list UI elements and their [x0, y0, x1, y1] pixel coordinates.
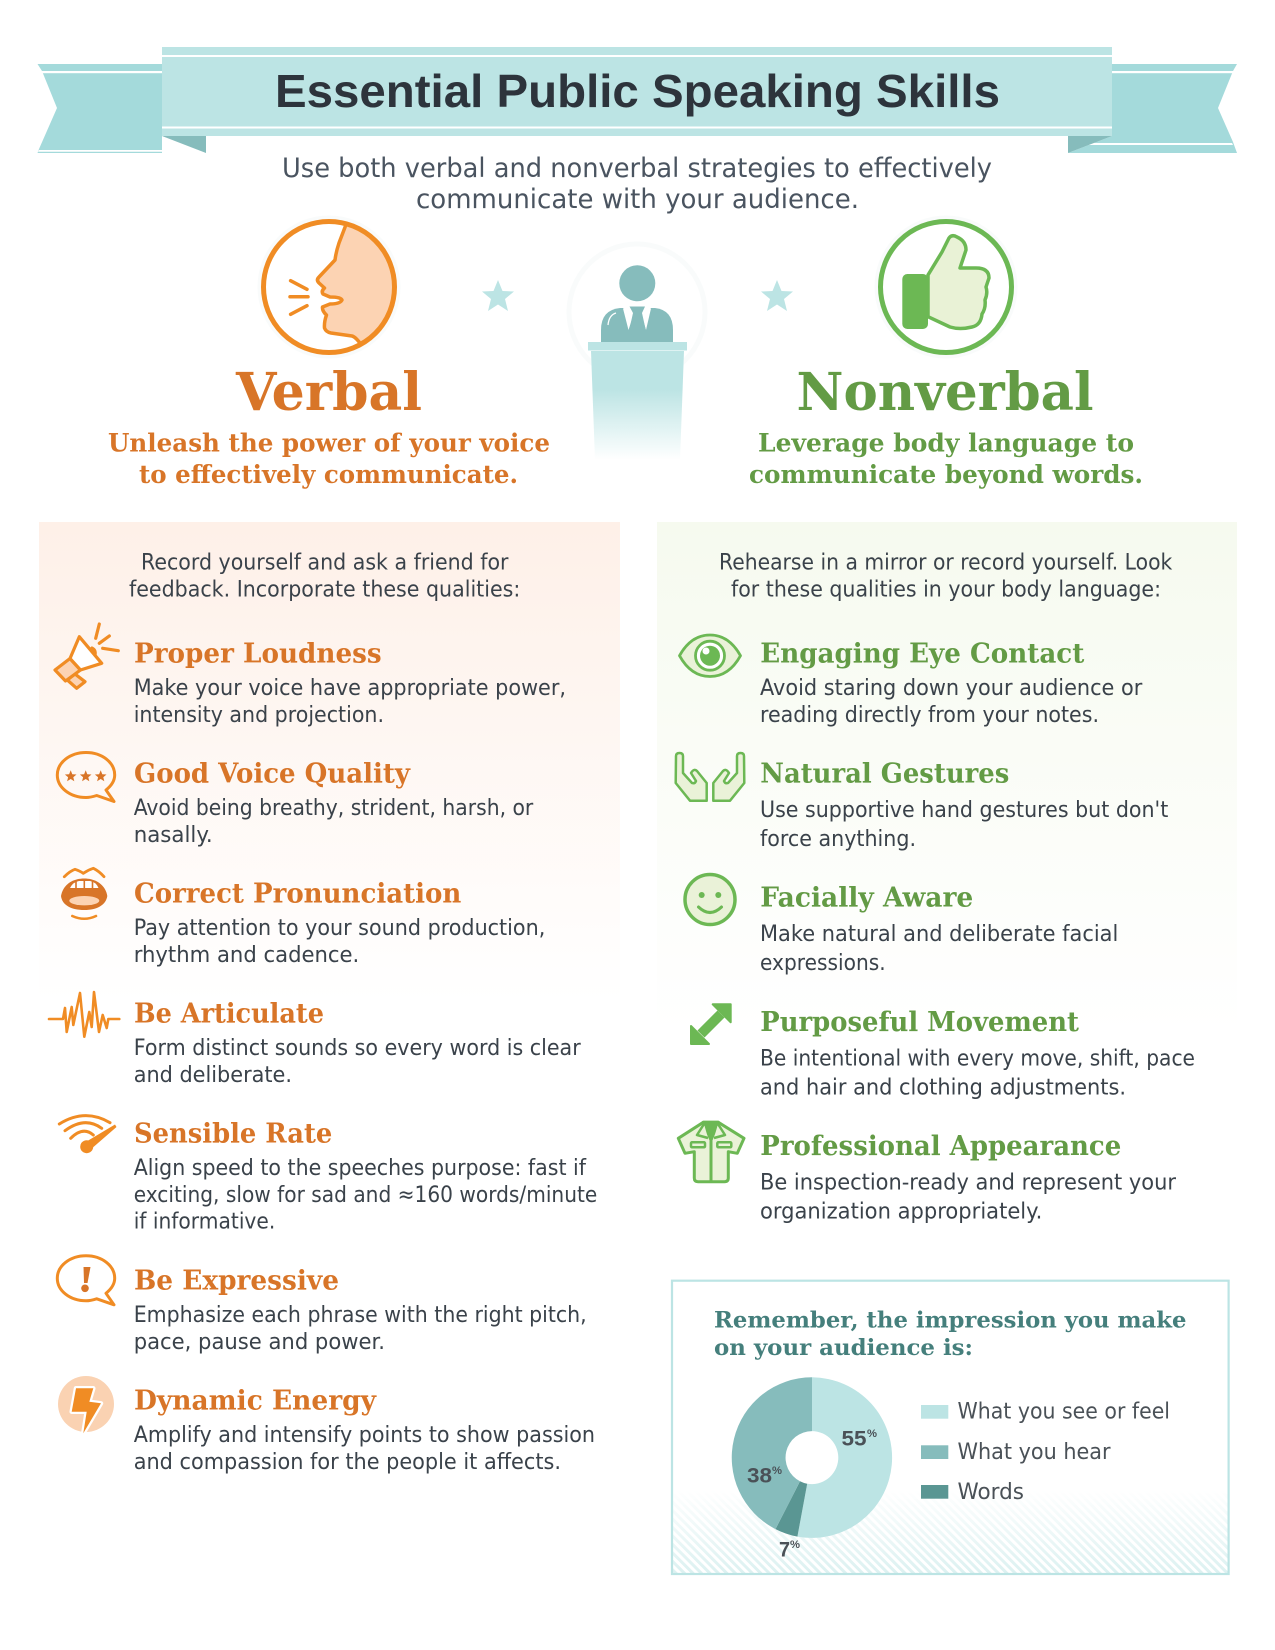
item: Good Voice Quality: Good Voice Quality [134, 759, 411, 790]
chart heading: on your audience is: [714, 1335, 973, 1361]
banner main [162, 47, 1112, 136]
item: Be Articulate: Form distinct sounds so every word is clear [134, 1036, 582, 1061]
icon: shirt [678, 1122, 744, 1182]
item: Professional Appearance: Professional Appearance [760, 1131, 1121, 1162]
item: Natural Gestures: Natural Gestures [760, 759, 1009, 790]
nonverbal tagline: Leverage body language to [758, 429, 1134, 458]
item: Proper Loudness: intensity and projection. [134, 703, 384, 728]
item: Be Expressive [134, 1265, 587, 1355]
chart heading [714, 1308, 1186, 1361]
item: Engaging Eye Contact: Avoid staring down your audience or [760, 676, 1143, 701]
item: Be Articulate: Be Articulate [134, 998, 324, 1029]
label 38% [747, 1465, 782, 1488]
item: Facially Aware [760, 883, 1118, 976]
heading: Nonverbal: Nonverbal [796, 362, 1094, 423]
title banner [38, 47, 1237, 153]
icon: lightning bolt [58, 1376, 114, 1433]
verbal intro: Record yourself and ask a friend for [141, 550, 509, 575]
panel: nonverbal qualities [657, 522, 1237, 1224]
item: Professional Appearance [760, 1131, 1177, 1224]
item: Natural Gestures [760, 759, 1169, 852]
banner left tail [38, 64, 206, 153]
label 38%: 38 [747, 1465, 772, 1488]
item: Purposeful Movement: Purposeful Movement [760, 1007, 1079, 1038]
icon: eye [680, 635, 740, 676]
item: Proper Loudness: Proper Loudness [134, 639, 382, 670]
item: Purposeful Movement: Be intentional with every move, shift, pace [760, 1046, 1195, 1071]
label 7% [779, 1539, 800, 1562]
item: Be Expressive: Emphasize each phrase with the right pitch, [134, 1303, 587, 1328]
item: Dynamic Energy: and compassion for the people it affects. [134, 1450, 561, 1475]
item: Facially Aware: Facially Aware [760, 883, 973, 914]
item: Sensible Rate: exciting, slow for sad and ≈160 words/minute [134, 1183, 597, 1208]
heading: Verbal: Verbal [235, 362, 422, 423]
icon: speech bubble with stars [57, 752, 115, 802]
item: Be Expressive: pace, pause and power. [134, 1330, 385, 1355]
banner right tail [1068, 64, 1237, 153]
verbal intro [129, 550, 520, 602]
icon: double arrow [691, 1004, 731, 1044]
label 7%: % [790, 1539, 800, 1551]
item: Good Voice Quality [134, 759, 534, 848]
icon: thumbs up [876, 218, 1016, 356]
item: Correct Pronunciation: rhythm and cadence. [134, 943, 359, 968]
item: Sensible Rate [134, 1118, 597, 1235]
subtitle: Use both verbal and nonverbal strategies to effectively [282, 153, 992, 184]
nonverbal tagline: communicate beyond words. [749, 460, 1143, 489]
item: Sensible Rate: Align speed to the speeches purpose: fast if [134, 1156, 587, 1181]
item: Facially Aware: Make natural and deliberate facial [760, 922, 1118, 947]
item: Sensible Rate: Sensible Rate [134, 1118, 332, 1149]
nonverbal intro: Rehearse in a mirror or record yourself. Look [719, 550, 1173, 575]
icon: open hands [676, 753, 744, 801]
item: Be Articulate: and deliberate. [134, 1063, 292, 1088]
item: Purposeful Movement [760, 1007, 1195, 1100]
item: Be Articulate [134, 998, 582, 1088]
item: Good Voice Quality: Avoid being breathy, strident, harsh, or [134, 796, 534, 821]
item: Engaging Eye Contact: Engaging Eye Contact [760, 639, 1085, 670]
panel: verbal qualities [39, 522, 620, 1475]
label 55%: % [867, 1428, 877, 1440]
legend: What you see or feel [958, 1400, 1170, 1425]
item: Proper Loudness: Make your voice have appropriate power, [134, 676, 566, 701]
icon: speaker at podium [569, 244, 705, 460]
label 7%: 7 [779, 1539, 790, 1562]
icon: speed gauge [59, 1116, 116, 1153]
item: Professional Appearance: Be inspection-ready and represent your [760, 1170, 1177, 1195]
icon: exclamation bubble [57, 1256, 115, 1305]
panel border [672, 1281, 1229, 1574]
icon: smiley face [685, 874, 735, 924]
nonverbal tagline [749, 429, 1143, 489]
item: Dynamic Energy: Amplify and intensify points to show passion [134, 1423, 595, 1448]
item: Purposeful Movement: and hair and clothing adjustments. [760, 1075, 1126, 1100]
nonverbal intro: for these qualities in your body language: [731, 577, 1161, 602]
subtitle: communicate with your audience. [416, 184, 859, 215]
label 55%: 55 [842, 1428, 867, 1451]
legend: Words [958, 1480, 1024, 1505]
verbal tagline: Unleash the power of your voice [108, 429, 550, 458]
panel: impression chart [672, 1281, 1229, 1574]
legend [921, 1400, 1170, 1505]
verbal tagline: to effectively communicate. [139, 460, 518, 489]
item: Natural Gestures: Use supportive hand gestures but don't [760, 798, 1169, 823]
item: Dynamic Energy: Dynamic Energy [134, 1385, 377, 1416]
legend: What you hear [958, 1440, 1111, 1465]
panel background [657, 522, 1237, 1032]
item: Engaging Eye Contact: reading directly from your notes. [760, 703, 1099, 728]
item: Engaging Eye Contact [760, 639, 1143, 728]
subtitle [282, 153, 992, 215]
icon: left star [482, 280, 514, 311]
nonverbal intro [719, 550, 1173, 602]
icon: megaphone [55, 624, 118, 688]
item: Natural Gestures: force anything. [760, 827, 916, 852]
hatch background [673, 1510, 1228, 1573]
verbal tagline [108, 429, 550, 489]
donut chart [732, 1377, 892, 1538]
item: Dynamic Energy [134, 1385, 595, 1475]
item: Correct Pronunciation: Pay attention to your sound production, [134, 916, 545, 941]
item: Professional Appearance: organization appropriately. [760, 1199, 1042, 1224]
icon: mouth [61, 868, 107, 919]
verbal intro: feedback. Incorporate these qualities: [129, 577, 520, 602]
icon: sound wave [49, 992, 119, 1037]
icon: right star [761, 280, 793, 311]
label 38%: % [772, 1465, 782, 1477]
item: Proper Loudness [134, 639, 566, 728]
item: Facially Aware: expressions. [760, 951, 886, 976]
label 55% [842, 1428, 877, 1451]
item: Correct Pronunciation: Correct Pronunciation [134, 879, 462, 910]
title text: Essential Public Speaking Skills [275, 65, 1000, 117]
item: Sensible Rate: if informative. [134, 1210, 275, 1235]
item: Correct Pronunciation [134, 879, 545, 968]
panel background [39, 522, 620, 1002]
item: Be Expressive: Be Expressive [134, 1265, 339, 1296]
item: Good Voice Quality: nasally. [134, 823, 213, 848]
chart heading: Remember, the impression you make [714, 1308, 1186, 1334]
icon: speaking face [260, 218, 400, 356]
